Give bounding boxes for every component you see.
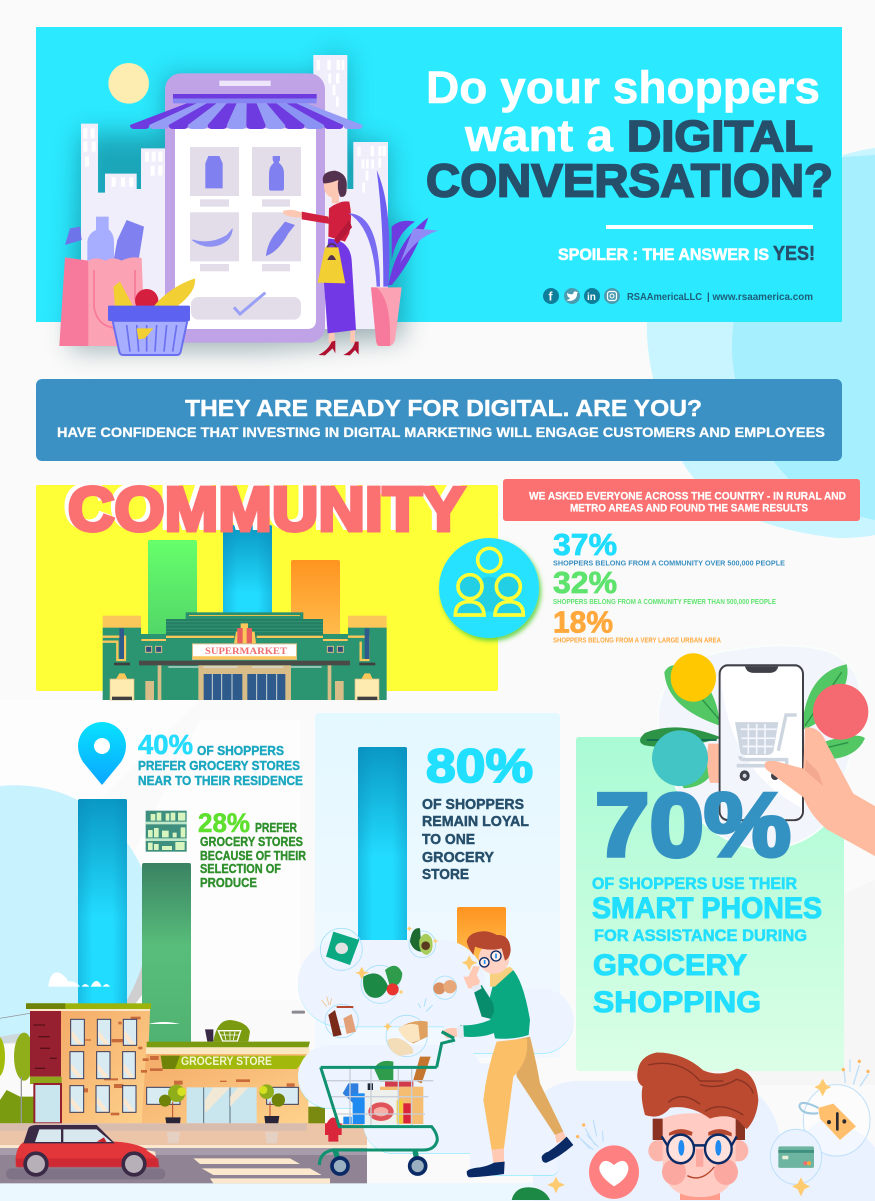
hero title: want a	[464, 110, 614, 161]
stat: 32 percent: 32%	[553, 565, 617, 600]
community heading: COMMUNITY	[64, 473, 460, 542]
panel: loyalty	[315, 713, 560, 1058]
stat: 32 percent	[553, 565, 776, 606]
smart phone description	[592, 874, 822, 1019]
store front	[141, 1020, 310, 1123]
bottom right portrait and icons	[580, 1052, 870, 1200]
car	[6, 1125, 165, 1179]
stat: 40 percent: PREFER GROCERY STORES	[138, 758, 300, 773]
stat: 28 percent: BECAUSE OF THEIR	[200, 849, 306, 863]
stat: 28 percent: PREFER	[255, 821, 297, 835]
smart phone description: OF SHOPPERS USE THEIR	[592, 874, 797, 893]
stat: 40 percent: 40%	[138, 729, 193, 760]
ready for digital band: HAVE CONFIDENCE THAT INVESTING IN DIGITAL MARKETING WILL ENGAGE CUSTOMERS AND EMPLOYEES	[57, 424, 825, 440]
lettuce bottom	[512, 1187, 550, 1200]
hand fingers behind phone	[707, 744, 772, 829]
bar: 28 percent	[142, 863, 191, 1048]
city buildings	[81, 55, 388, 337]
stat: 28 percent	[198, 808, 306, 890]
awning	[130, 103, 363, 129]
loyalty description: REMAIN LOYAL	[422, 814, 529, 830]
lavender blob behind phone	[658, 645, 860, 849]
planters	[159, 1084, 285, 1131]
stat: 28 percent: GROCERY STORES	[200, 835, 303, 849]
hero title: Do your shoppers	[426, 62, 820, 113]
hero banner	[36, 27, 842, 322]
stat: 37 percent: 37%	[553, 527, 617, 562]
community bar chart	[148, 525, 340, 650]
hero illustration	[59, 55, 438, 355]
stat: 37 percent	[553, 527, 785, 568]
grocery store sign text: GROCERY STORE	[181, 1056, 272, 1068]
hand and thumb	[765, 727, 875, 856]
bottom right cloud backdrop	[533, 1081, 875, 1201]
icon: location pin	[78, 722, 126, 785]
spoiler line: YES!	[773, 243, 815, 265]
stat: 28 percent: SELECTION OF	[200, 862, 281, 876]
trees and grass	[0, 1011, 328, 1132]
ready for digital band: THEY ARE READY FOR DIGITAL. ARE YOU?	[185, 395, 702, 421]
social icons and handle: | www.rsaamerica.com	[707, 291, 813, 303]
cart contents	[343, 1057, 431, 1124]
loyalty description: STORE	[422, 867, 469, 883]
smart phone description: SHOPPING	[593, 986, 761, 1019]
spoiler line	[558, 243, 815, 265]
sparkles and dashes	[322, 926, 596, 1193]
smart phone description: SMART PHONES	[592, 892, 822, 925]
stat: 40 percent: OF SHOPPERS	[197, 743, 284, 758]
cloud backdrop	[298, 940, 573, 1175]
social icons and handle: RSAAmericaLLC	[627, 291, 702, 303]
basket with groceries	[108, 278, 195, 355]
smart phone description: FOR ASSISTANCE DURING	[594, 926, 807, 945]
supermarket building	[103, 612, 387, 700]
hero title: DIGITAL	[627, 112, 813, 161]
sidewalk and road	[0, 1123, 367, 1183]
smart phone description: GROCERY	[593, 949, 747, 982]
smartphone	[720, 665, 803, 820]
illustration shadow	[70, 57, 403, 350]
loyalty description: GROCERY	[422, 850, 494, 866]
leaves	[640, 664, 865, 788]
bar: 80 percent	[358, 747, 407, 947]
survey note callout: WE ASKED EVERYONE ACROSS THE COUNTRY - IN RURAL AND	[529, 490, 846, 502]
loyalty description: OF SHOPPERS	[422, 797, 524, 813]
community heading	[64, 485, 468, 533]
social icons and handle: f	[548, 290, 554, 304]
survey note callout: METRO AREAS AND FOUND THE SAME RESULTS	[570, 502, 808, 514]
community heading: COMMUNITY	[68, 476, 465, 544]
ready for digital band	[36, 379, 842, 461]
shopper man	[442, 931, 573, 1177]
social icons and handle: in	[587, 292, 596, 303]
sun	[108, 63, 149, 104]
bubble icons	[770, 1060, 870, 1196]
grocery store street scene	[0, 972, 367, 1183]
shopping bag	[59, 217, 145, 346]
fire hydrant	[325, 1117, 342, 1142]
loyalty description	[422, 797, 529, 883]
food bubbles	[320, 928, 457, 1057]
panel: smart phones	[576, 645, 875, 1071]
orange bar	[457, 907, 506, 967]
icon: community people	[439, 538, 539, 638]
stat: 80 percent: 80%	[426, 739, 533, 792]
panel: nearby stores	[0, 722, 306, 1048]
supermarket sign text: SUPERMARKET	[205, 647, 288, 657]
icon: produce shelves	[146, 811, 187, 852]
bar: 40 percent	[78, 799, 127, 1014]
survey note callout	[503, 479, 860, 521]
shopping cart	[319, 1032, 455, 1174]
shopper woman	[283, 171, 359, 355]
stat: 18 percent: SHOPPERS BELONG FROM A VERY LARGE URBAN AREA	[553, 636, 721, 644]
shopper with cart illustration	[298, 926, 596, 1200]
stat: 40 percent: NEAR TO THEIR RESIDENCE	[138, 773, 303, 788]
sky blob	[0, 785, 147, 1045]
loyalty description: TO ONE	[422, 832, 475, 848]
apartment building	[26, 1003, 151, 1123]
spoiler line: SPOILER : THE ANSWER IS	[558, 246, 769, 264]
title divider	[606, 225, 813, 229]
decorative circles	[671, 653, 716, 702]
stat: 37 percent: SHOPPERS BELONG FROM A COMMUNITY OVER 500,000 PEOPLE	[553, 558, 785, 568]
stat: 18 percent: 18%	[553, 604, 613, 640]
cart icon	[735, 715, 797, 781]
stat: 70 percent: 70%	[595, 776, 791, 876]
panel: community	[36, 473, 498, 691]
stat: 28 percent: PRODUCE	[200, 876, 257, 890]
portrait man	[637, 1052, 758, 1200]
stat: 32 percent: SHOPPERS BELONG FROM A COMMUNITY FEWER THAN 500,000 PEOPLE	[553, 597, 776, 606]
dashes near heart	[580, 1120, 603, 1149]
clouds	[48, 972, 180, 1024]
stat: 18 percent	[553, 604, 721, 644]
product tiles	[190, 147, 301, 320]
stat: 40 percent	[138, 729, 303, 788]
potted plant	[348, 170, 438, 346]
hero title	[426, 62, 833, 206]
stat: 28 percent: 28%	[198, 808, 250, 838]
phone storefront	[130, 73, 363, 343]
social icons and handle	[543, 288, 813, 304]
hero title: CONVERSATION?	[426, 154, 833, 206]
icon: heart	[589, 1145, 639, 1199]
